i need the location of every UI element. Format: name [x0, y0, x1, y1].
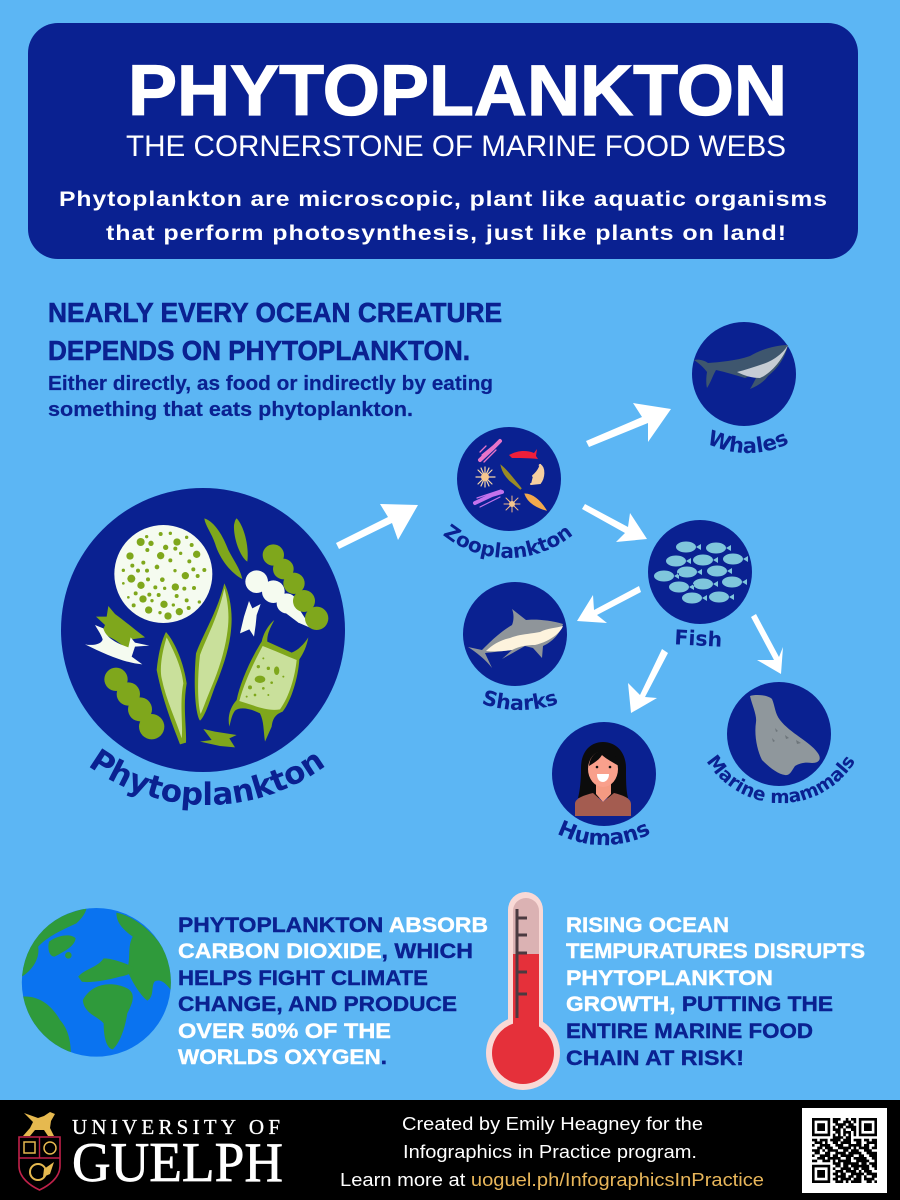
heading: nearly every ocean creature: DEPENDS ON PHYTOPLANKTON.: [48, 335, 470, 366]
credit text: Infographics in Practice program.: [403, 1142, 697, 1162]
intro text: Phytoplankton are microscopic, plant like aquatic organisms: [59, 187, 828, 211]
text: climate fact: CARBON DIOXIDE , WHICH: [178, 939, 473, 963]
icon: long cell right: [195, 583, 232, 721]
node: marine mammals: [727, 682, 831, 786]
node: humans: [552, 722, 656, 826]
icon: seal: [750, 695, 820, 775]
icon: thermometer: [486, 892, 560, 1090]
icon: small white cell: [240, 601, 261, 637]
icon: woman: [575, 742, 631, 816]
label: Fish: Fish: [676, 629, 721, 647]
icon: small green bottom cell: [200, 729, 237, 747]
text: warming fact: CHAIN AT RISK!: [566, 1046, 744, 1070]
arrow: phytoplankton to zooplankton: [336, 504, 418, 549]
icon: green and white chain diatom: [245, 544, 328, 630]
footer: [0, 1100, 900, 1200]
label: Zooplankton: Zooplankton: [443, 524, 572, 560]
intro text: that perform photosynthesis, just like plants on land!: [106, 221, 787, 245]
text: warming fact: RISING OCEAN: [566, 913, 729, 937]
icon: round diatom: [114, 525, 212, 623]
phytoplankton circle: [61, 488, 345, 772]
node: sharks: [463, 582, 567, 686]
credit text: Learn more at uoguel.ph/InfographicsInPractice: [340, 1170, 764, 1190]
text: warming fact: ENTIRE MARINE FOOD: [566, 1019, 813, 1043]
arrow: zooplankton to whales: [586, 403, 671, 447]
QR code: [802, 1108, 887, 1193]
heading: nearly every ocean creature: something that eats phytoplankton.: [48, 398, 413, 421]
text: climate fact: WORLDS OXYGEN .: [178, 1045, 387, 1069]
icon: shark: [468, 609, 563, 668]
logo: crest: [19, 1112, 60, 1190]
icon: slim green cells: [204, 518, 248, 579]
text: warming fact: PHYTOPLANKTON: [566, 966, 773, 990]
title: PHYTOPLANKTON: [128, 52, 787, 131]
arrow: zooplankton to fish: [582, 504, 647, 542]
text: climate fact: OVER 50% OF THE: [178, 1019, 391, 1043]
credit text: [340, 1114, 764, 1190]
heading: nearly every ocean creature: [48, 297, 502, 421]
node: whales: [692, 322, 796, 426]
logo: wordmark: GUELPH: [72, 1132, 283, 1194]
intro text: [59, 187, 828, 245]
arrow: fish to humans: [628, 649, 668, 713]
node: fish: [648, 520, 752, 624]
text: climate fact: HELPS FIGHT CLIMATE: [178, 966, 428, 990]
node: zooplankton: [457, 427, 561, 531]
text: warming fact: TEMPURATURES DISRUPTS: [566, 939, 865, 963]
icon: green chain lower left: [104, 668, 164, 739]
text: warming fact: [566, 913, 865, 1070]
icon: earth: [18, 908, 175, 1057]
icon: square spined cell: [229, 620, 308, 742]
icon: left green and white cell: [85, 606, 149, 664]
icon: zooplankton group: [475, 441, 546, 512]
subtitle: THE CORNERSTONE OF MARINE FOOD WEBS: [126, 130, 786, 163]
label: Sharks: Sharks: [482, 690, 558, 710]
text: climate fact: PHYTOPLANKTON ABSORB: [178, 913, 488, 937]
arrow: fish to marine mammals: [751, 614, 783, 674]
label: Whales: Whales: [710, 430, 788, 454]
heading: nearly every ocean creature: NEARLY EVERY OCEAN CREATURE: [48, 297, 502, 328]
text: warming fact: GROWTH, PUTTING THE: [566, 992, 833, 1016]
heading: nearly every ocean creature: Either directly, as food or indirectly by eating: [48, 372, 493, 395]
arrow: fish to sharks: [577, 586, 641, 623]
header panel: [28, 23, 858, 259]
label: Humans: Humans: [558, 820, 650, 846]
icon: fish school: [654, 542, 748, 604]
credit text: Created by Emily Heagney for the: [402, 1114, 703, 1134]
label: Marine mammals: Marine mammals: [707, 754, 854, 804]
label: Phytoplankton: Phytoplankton: [90, 748, 324, 810]
icon: long cell centre: [157, 632, 187, 744]
text: climate fact: CHANGE, AND PRODUCE: [178, 992, 457, 1016]
text: climate fact: [178, 913, 488, 1069]
logo: wordmark: UNIVERSITY OF: [72, 1115, 280, 1139]
icon: whale: [694, 345, 788, 389]
